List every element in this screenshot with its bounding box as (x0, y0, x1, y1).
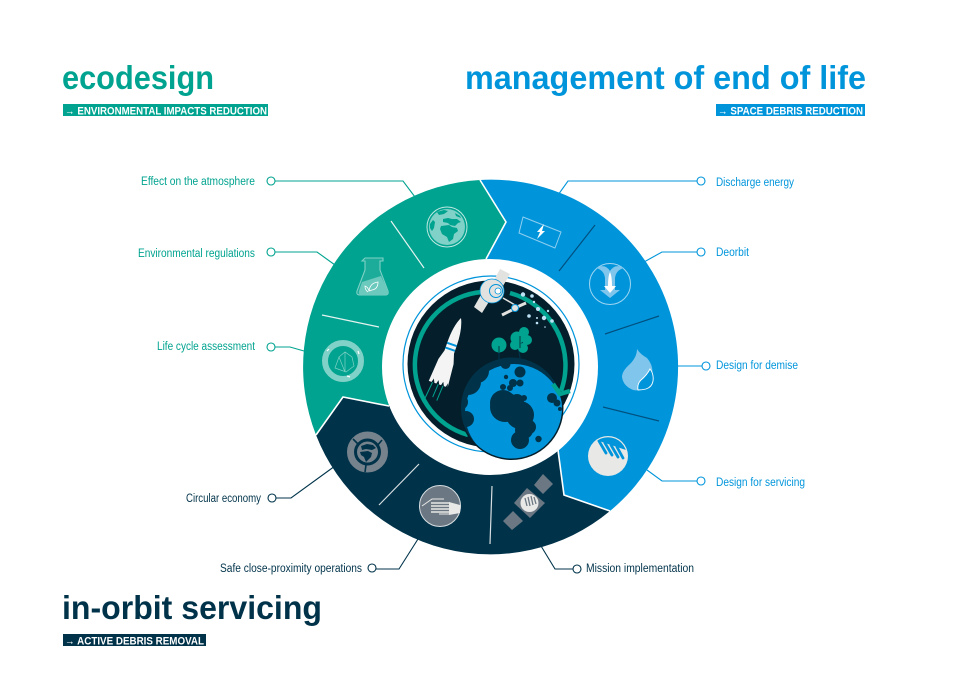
ring segment: management of end of life (480, 180, 678, 511)
north blobs (500, 364, 510, 369)
left coast mounds (468, 382, 481, 395)
heading: management of end of life (465, 59, 866, 118)
heading: management of end of life: → SPACE DEBRIS REDUCTION (718, 106, 863, 118)
leader: deorbit (644, 247, 750, 262)
heading: in-orbit servicing: in-orbit servicing (62, 589, 322, 626)
leader: mission implementation (541, 546, 694, 575)
ring segment: in-orbit servicing (316, 397, 610, 554)
white inner disc (382, 259, 598, 475)
leader: deorbit: Deorbit (716, 247, 750, 259)
heading: in-orbit servicing: → ACTIVE DEBRIS REMOVAL (65, 636, 204, 648)
leader: design for demise (676, 360, 798, 372)
icon: satellite (503, 474, 553, 530)
rocket (423, 315, 470, 404)
heading: management of end of life: management of end of life (465, 59, 866, 96)
segment separators (316, 180, 610, 511)
icon: flame (622, 349, 653, 390)
leader: safe close-proximity operations: Safe close-proximity operations (220, 563, 362, 575)
thin blue ring (403, 276, 579, 452)
heading: ecodesign: ecodesign (62, 59, 214, 96)
ring segment: ecodesign (303, 180, 506, 435)
heading: in-orbit servicing (62, 589, 322, 648)
debris dots (521, 292, 554, 328)
space background (408, 280, 574, 448)
infographic (63, 65, 865, 646)
leader: effect on the atmosphere: Effect on the atmosphere (141, 176, 255, 188)
satellite large (474, 269, 510, 313)
leader: design for servicing (647, 470, 805, 489)
leader: discharge energy (558, 177, 794, 195)
Europe Africa blobs (490, 390, 513, 406)
leader: effect on the atmosphere (141, 176, 415, 197)
icon: circular economy (350, 435, 384, 472)
heading: ecodesign (62, 59, 268, 118)
icon: handshake (420, 486, 460, 526)
leader: environmental regulations: Environmental regulations (138, 248, 255, 260)
heading: ecodesign: → ENVIRONMENTAL IMPACTS REDUCTION (65, 106, 267, 118)
satellite small (502, 298, 526, 315)
icon: flask with leaf (357, 258, 388, 295)
leader: environmental regulations (138, 248, 335, 265)
trees (492, 327, 532, 359)
leader: design for servicing: Design for servicing (716, 477, 805, 489)
icon: globe (atmosphere) (427, 207, 467, 247)
leader: circular economy (186, 466, 335, 505)
leader: circular economy: Circular economy (186, 493, 261, 505)
leader: safe close-proximity operations (220, 539, 418, 575)
icon: battery (519, 217, 561, 248)
central emblem (403, 269, 579, 462)
leader: discharge energy: Discharge energy (716, 177, 794, 189)
orbit arc left (415, 292, 482, 435)
orbit arc right and arrow (510, 293, 570, 394)
leader: design for demise: Design for demise (716, 360, 798, 372)
leader: life cycle assessment: Life cycle assessment (157, 341, 256, 353)
earth (461, 358, 564, 460)
dividers (322, 221, 659, 544)
icon: comb (design for servicing) (588, 436, 632, 476)
icon: life cycle ring (325, 343, 361, 379)
leader: mission implementation: Mission implementation (586, 563, 694, 575)
icon: deorbit (590, 264, 630, 304)
